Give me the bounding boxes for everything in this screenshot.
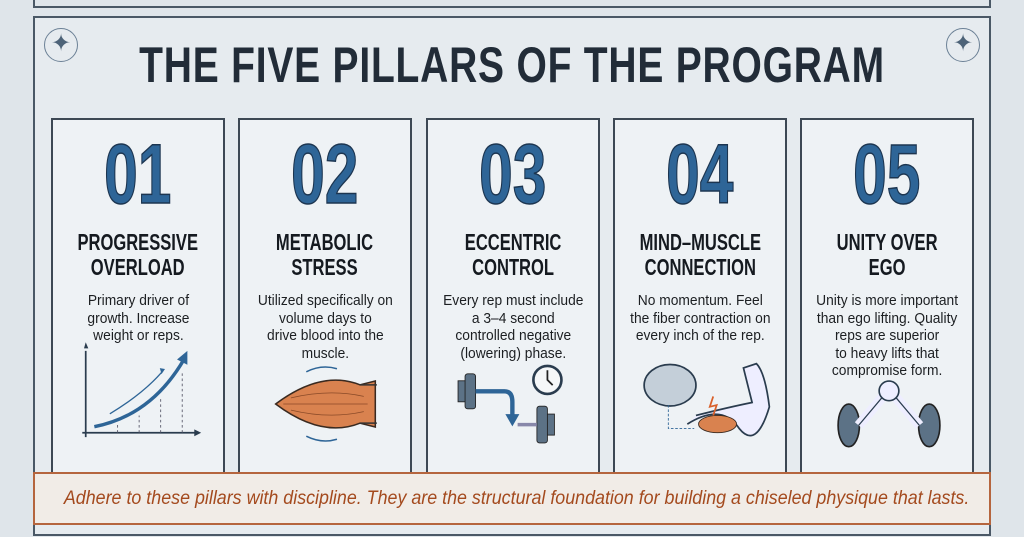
panel: 05 unity over ego: EGO xyxy=(869,254,905,280)
panel: 04 mind-muscle connection: No momentum. Feel xyxy=(637,292,763,309)
panel: 02 metabolic stress: drive blood into the xyxy=(267,327,383,344)
panel: 04 mind-muscle connection: 04 xyxy=(666,127,734,221)
panel: 04 mind-muscle connection: MIND–MUSCLE xyxy=(639,229,761,255)
icon: brain and bicep xyxy=(643,362,770,436)
icon: compass left: ✦ xyxy=(51,30,71,57)
panel: 03 eccentric control: ECCENTRIC xyxy=(465,229,561,255)
panel: 01 progressive overload: weight or reps. xyxy=(93,327,183,344)
panel: 04 mind-muscle connection xyxy=(613,118,787,474)
icon: clasped hands dumbbells xyxy=(837,380,941,448)
panel: 03 eccentric control xyxy=(426,118,600,474)
panel: 02 metabolic stress: Utilized specifically on xyxy=(257,292,392,309)
panel: 03 eccentric control: Every rep must include xyxy=(443,292,583,309)
panel: 05 unity over ego: than ego lifting. Quality xyxy=(817,310,957,326)
icon: growth chart xyxy=(82,342,202,438)
panel: 01 progressive overload: PROGRESSIVE xyxy=(78,229,198,255)
panel: 02 metabolic stress xyxy=(238,118,412,474)
icon: compass right xyxy=(946,28,980,62)
panel: 03 eccentric control: 03 xyxy=(479,127,547,221)
panel: 05 unity over ego: Unity is more important xyxy=(816,292,958,309)
panel: 03 eccentric control: (lowering) phase. xyxy=(460,344,566,362)
panel: 01 progressive overload: 01 xyxy=(104,127,172,221)
panel: 02 metabolic stress: 02 xyxy=(291,127,359,221)
panel: 01 progressive overload: Primary driver of xyxy=(87,292,189,309)
panel: 01 progressive overload: growth. Increase xyxy=(87,310,189,326)
panel: 04 mind-muscle connection: the fiber contraction on xyxy=(630,310,770,326)
panel: 02 metabolic stress: METABOLIC xyxy=(276,229,374,255)
panel: 05 unity over ego: UNITY OVER xyxy=(837,229,937,255)
panel: 03 eccentric control: controlled negative xyxy=(455,327,571,344)
callout: footer xyxy=(33,472,991,525)
panel: 05 unity over ego: reps are superior xyxy=(835,327,939,344)
panel: 04 mind-muscle connection: CONNECTION xyxy=(644,254,756,280)
icon: dumbbells and clock xyxy=(458,364,563,444)
panel: 01 progressive overload xyxy=(51,118,225,474)
panel: 04 mind-muscle connection: every inch of the rep. xyxy=(636,327,764,344)
panel: 03 eccentric control: CONTROL xyxy=(472,254,554,280)
panel: 02 metabolic stress: volume days to xyxy=(279,310,371,326)
panel: 02 metabolic stress: STRESS xyxy=(292,254,358,280)
panel: 03 eccentric control: a 3–4 second xyxy=(472,310,554,326)
panel: 05 unity over ego: compromise form. xyxy=(832,362,942,379)
callout: footer: Adhere to these pillars with discipline. They are the structural foundation for building a chiseled physique that lasts. xyxy=(64,488,969,509)
panel: 05 unity over ego: 05 xyxy=(853,127,921,221)
panel: 05 unity over ego xyxy=(800,118,974,474)
panel: 02 metabolic stress: muscle. xyxy=(301,344,349,362)
panel: 05 unity over ego: to heavy lifts that xyxy=(835,344,939,362)
panel: 01 progressive overload: OVERLOAD xyxy=(91,254,185,280)
icon: muscle xyxy=(274,366,377,442)
icon: compass right: ✦ xyxy=(953,30,973,57)
icon: compass left xyxy=(44,28,78,62)
title: THE FIVE PILLARS OF THE PROGRAM xyxy=(139,37,885,93)
